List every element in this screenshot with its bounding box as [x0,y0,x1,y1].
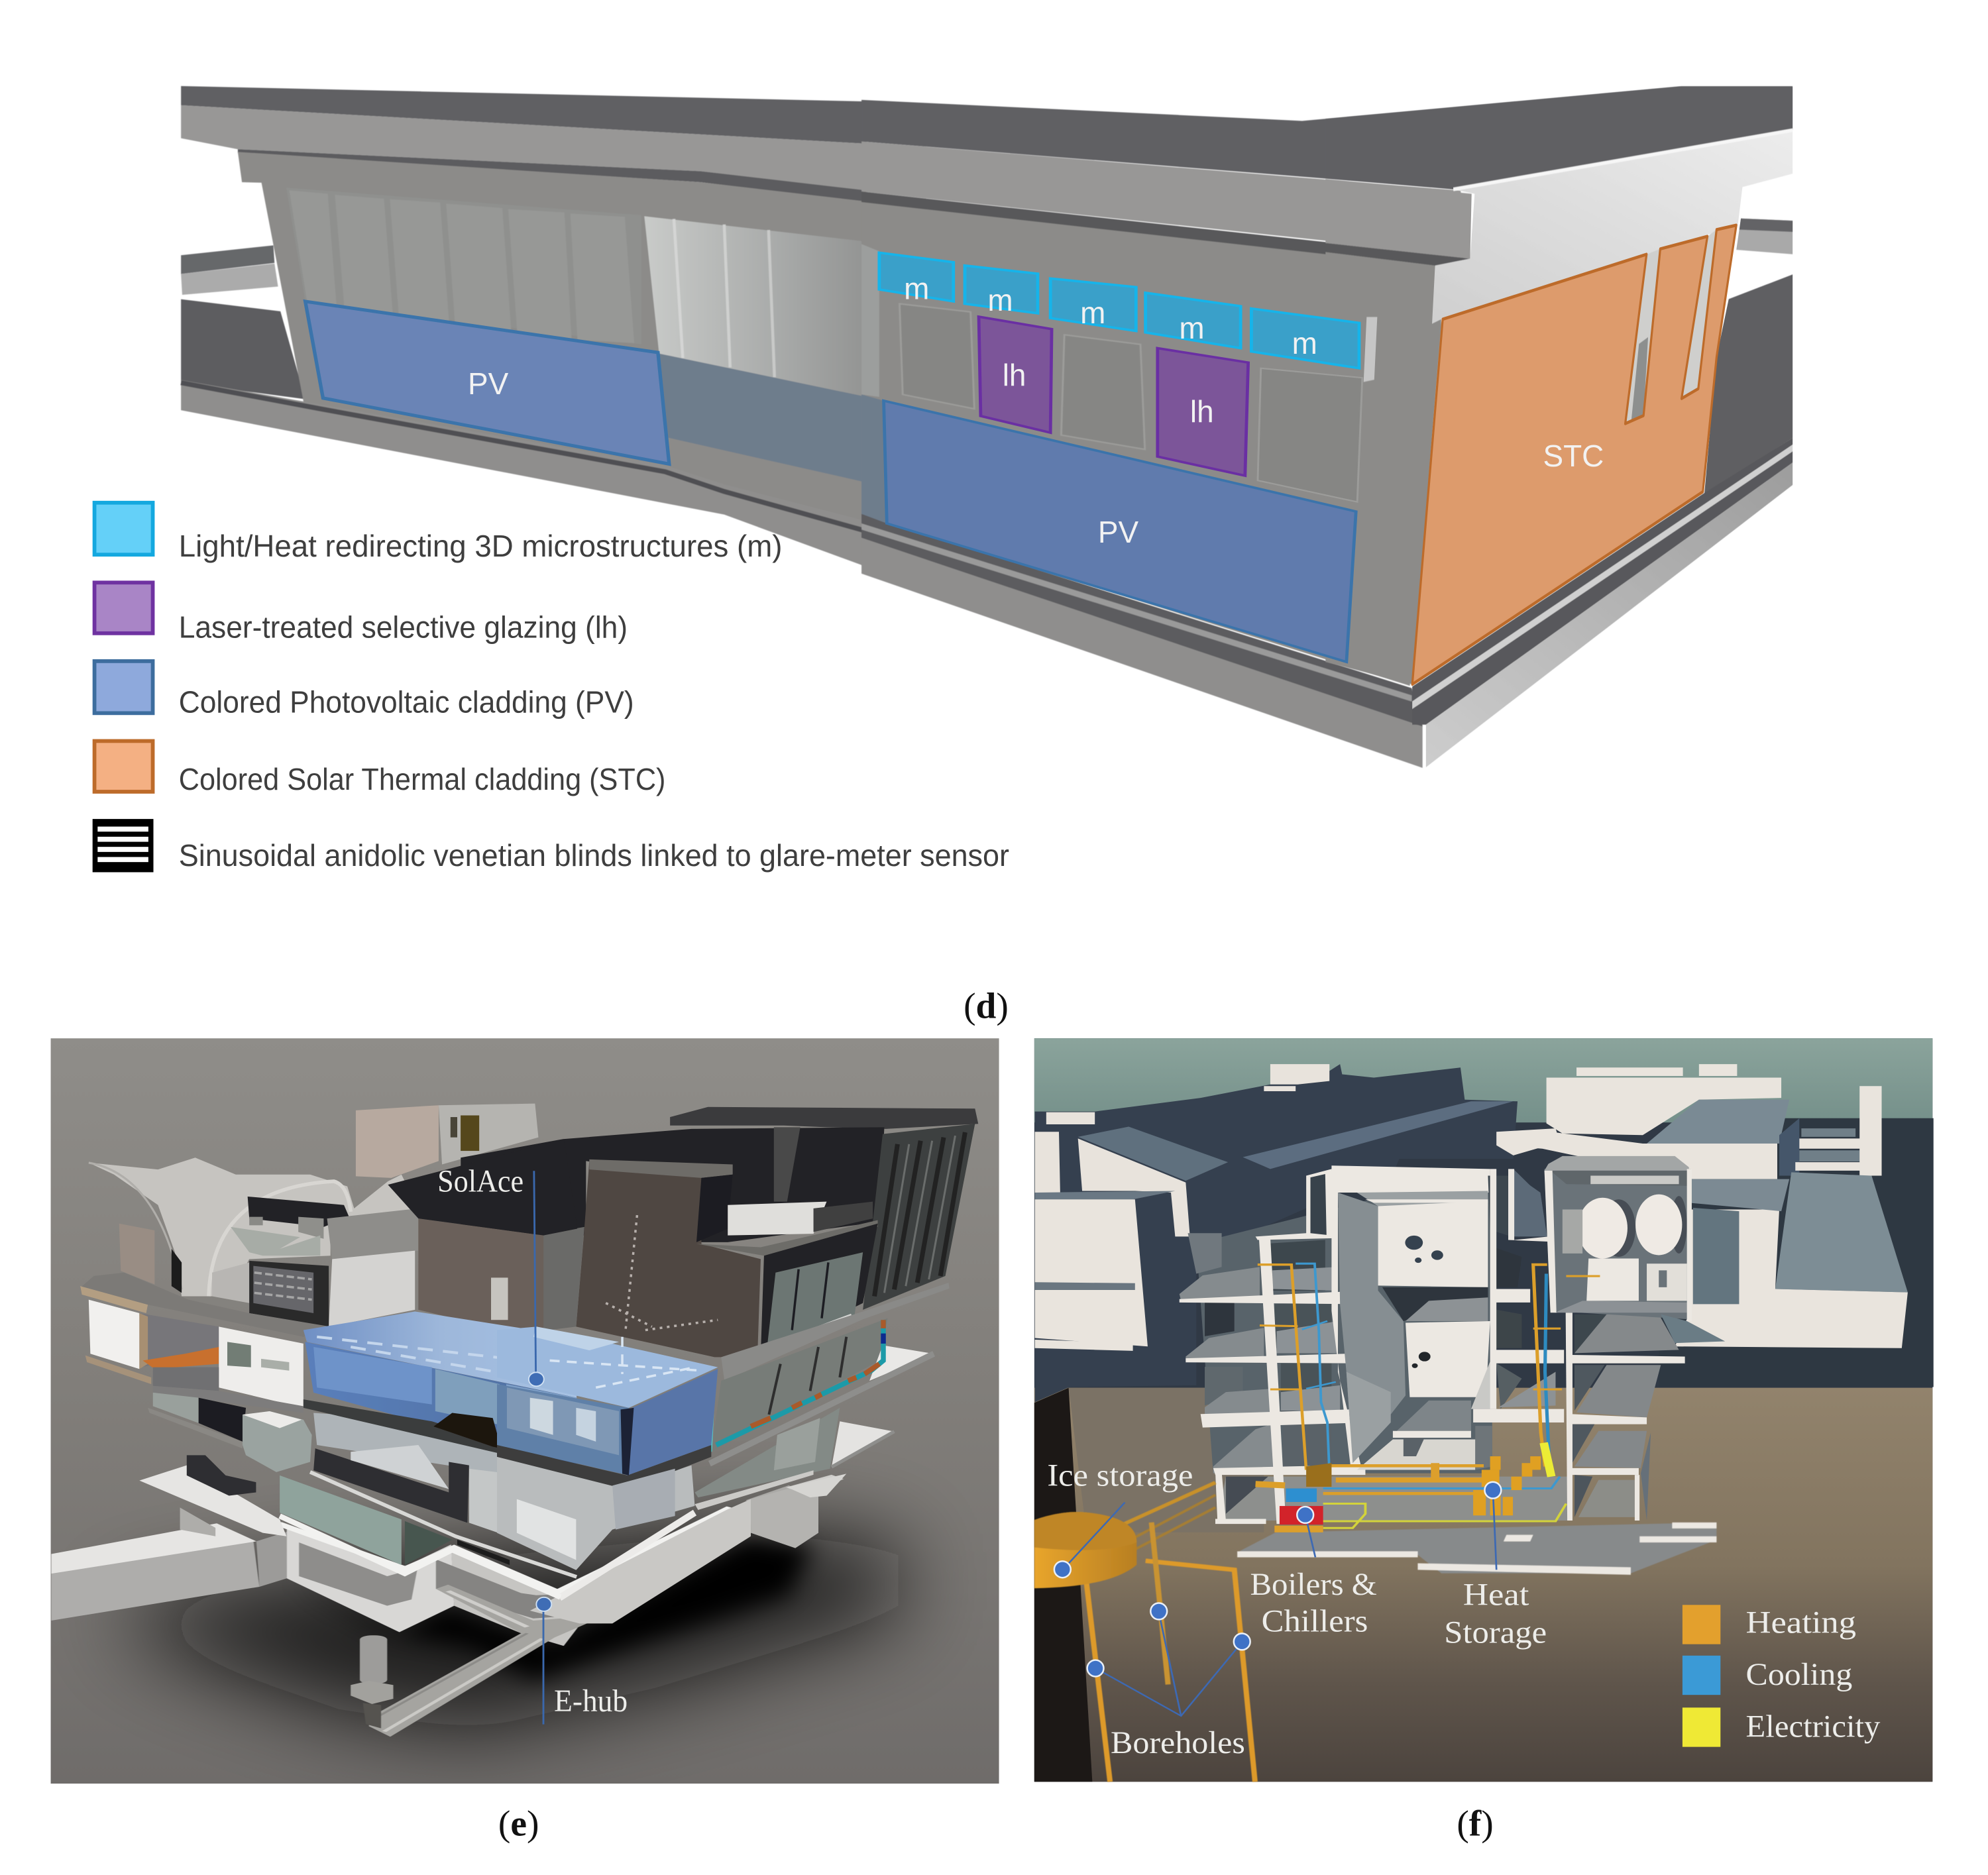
legend text: selective glazing: Laser-treated selective glazing (lh) [179,610,628,645]
surrounding buildings left [1035,1064,1560,1473]
label: boilers and chillers: Boilers & [1250,1567,1377,1602]
ice storage tank and borehole pipes [1034,1483,1255,1782]
panel labels on facade: lh [1190,394,1214,429]
label: ice storage: Ice storage [1047,1458,1193,1493]
panel: energy network section (f) [1034,1038,1934,1782]
cutaway drawing [51,1038,999,1784]
panel labels on facade: STC [1543,439,1604,473]
building facade left half [181,86,887,566]
panel labels on facade: m [987,283,1013,317]
callout line: SolAce and E-hub leaders [534,1171,543,1725]
laser-treated glazing panels [979,317,1248,476]
legend text: heating: Heating [1746,1605,1856,1640]
panel labels on facade: m [1080,295,1105,330]
label: heat storage: Heat [1463,1577,1529,1612]
callout dots [1054,1482,1501,1676]
legend swatch: heating [1683,1605,1720,1644]
legend swatch: cooling [1683,1656,1720,1695]
central section floors and core [1180,1165,1569,1524]
microstructure panels [879,252,1359,368]
solar thermal cladding panel [1412,225,1736,684]
photovoltaic panel, left [305,301,669,464]
panel labels on facade [468,272,1604,549]
panel: facade technologies (d) [93,86,1793,873]
panel labels on facade: PV [1098,515,1138,549]
label: boilers and chillers [1250,1567,1377,1639]
building facade right half [861,87,1792,768]
legend text: electricity: Electricity [1746,1709,1880,1744]
sky, dark city and ground [1034,1038,1932,1782]
panel labels on facade: m [1179,311,1205,345]
upper dark tower and brown walls [461,1107,978,1623]
panel labels on facade: lh [1003,358,1026,392]
pipes and plant [1256,1263,1600,1532]
surrounding buildings right [1498,1064,1934,1387]
left wing and lower floors [80,1139,577,1597]
icon: solar thermal swatch [95,741,153,792]
label: SolAce: SolAce [437,1164,524,1199]
colored photovoltaic cladding panel, right [879,252,1362,662]
legend text: microstructures: Light/Heat redirecting 3D microstructures (m) [179,529,782,563]
icon: venetian blinds swatch [93,819,154,872]
corner soffit and solar thermal wall [1325,86,1793,767]
legend text: photovoltaic: Colored Photovoltaic cladding (PV) [179,684,634,719]
section drawing [1034,1038,1934,1782]
caption (d): (d) [964,986,1009,1026]
label: E-hub: E-hub [554,1684,628,1719]
panel labels on facade: PV [468,366,509,401]
plant tower and right floors [1508,1156,1725,1521]
caption (f): (f) [1457,1804,1494,1845]
icon: microstructures swatch [95,503,153,555]
callout lines [1063,1490,1496,1716]
back tower and canopy [89,1104,538,1326]
panel: building cutaway (e) [51,1038,999,1784]
SolAce glass volume, right side [497,1215,718,1570]
legend: facade technologies [93,503,1009,873]
tunnel, basement and service pipe [51,1475,844,1737]
caption (e): (e) [498,1804,539,1845]
panel labels on facade: m [904,272,929,306]
callout dot: SolAce [529,1372,544,1386]
legend swatch: electricity [1683,1707,1720,1747]
deck at ground level [1237,1523,1716,1575]
icon: photovoltaic swatch [95,661,153,713]
legend text: cooling: Cooling [1746,1657,1852,1692]
legend text: venetian blinds: Sinusoidal anidolic venetian blinds linked to glare-meter sensor [179,838,1009,873]
label: heat storage: Storage [1444,1615,1547,1650]
label: heat storage [1444,1577,1547,1650]
panel labels on facade: m [1292,326,1317,360]
callout dot: E-hub [536,1597,551,1611]
label: boreholes: Boreholes [1111,1725,1245,1760]
label: boilers and chillers: Chillers [1262,1604,1368,1639]
icon: selective glazing swatch [95,582,153,633]
legend text: solar thermal: Colored Solar Thermal cladding (STC) [179,762,665,796]
